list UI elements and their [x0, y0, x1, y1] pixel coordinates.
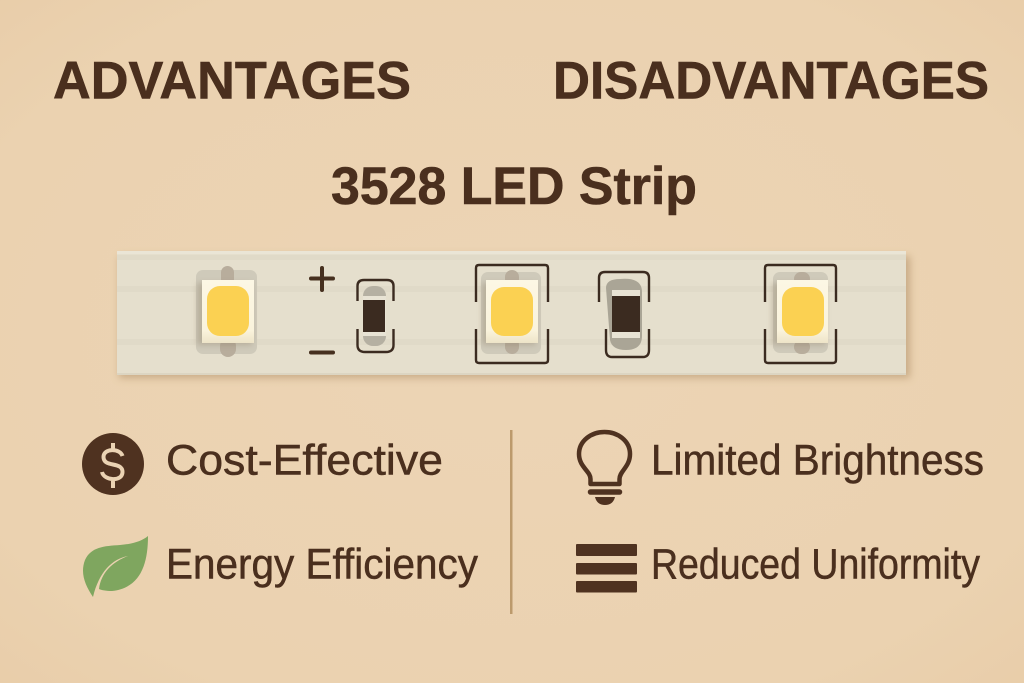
LED chip 2 [476, 265, 548, 363]
resistor 2 [599, 272, 649, 357]
resistor 1 [358, 280, 394, 352]
LED chip 1 [196, 266, 257, 357]
icon: leaf [83, 536, 148, 597]
advantages list [82, 433, 479, 597]
icon: three bars [576, 544, 637, 592]
icon: light bulb [579, 432, 630, 505]
label: cost-effective: Cost-Effective [166, 438, 443, 484]
disadvantages list [576, 432, 984, 592]
divider [510, 430, 512, 614]
polarity plus [311, 268, 333, 290]
heading: advantages: ADVANTAGES [53, 52, 411, 110]
polarity minus [311, 350, 333, 354]
label: energy efficiency: Energy Efficiency [166, 542, 479, 588]
title: 3528 LED Strip [331, 157, 697, 216]
LED chip 3 [765, 265, 836, 363]
heading: disadvantages: DISADVANTAGES [553, 52, 989, 110]
LED strip diagram [117, 251, 910, 378]
label: limited brightness: Limited Brightness [651, 438, 984, 484]
label: reduced uniformity: Reduced Uniformity [651, 542, 981, 588]
icon: dollar coin [82, 433, 144, 495]
